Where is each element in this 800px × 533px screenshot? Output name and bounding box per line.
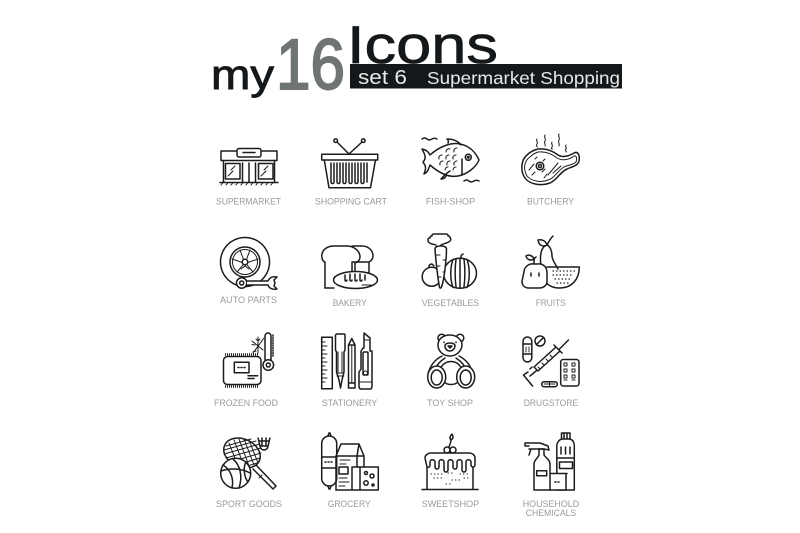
label: fish-shop: FISH-SHOP xyxy=(426,196,475,208)
label: vegetables: VEGETABLES xyxy=(422,298,479,309)
label: sweetshop: SWEETSHOP xyxy=(422,499,479,510)
title number: 16: 16 xyxy=(276,26,345,105)
icon: bread xyxy=(322,246,378,288)
label: supermarket: SUPERMARKET xyxy=(216,196,281,208)
icon: drugstore xyxy=(523,336,579,387)
label: fruits: FRUITS xyxy=(536,298,566,309)
icon: stationery xyxy=(322,333,372,389)
title xyxy=(211,16,622,105)
label: household chemicals xyxy=(523,499,579,519)
icon: frozen food xyxy=(224,333,274,386)
icon: fruits xyxy=(522,236,579,288)
label: drugstore: DRUGSTORE xyxy=(524,398,578,409)
icon: vegetables xyxy=(422,234,476,288)
icon: shopping cart xyxy=(322,139,378,188)
icon: sport goods xyxy=(219,432,276,489)
label: toy shop: TOY SHOP xyxy=(427,398,473,409)
label: bakery: BAKERY xyxy=(333,298,367,309)
label line: household: HOUSEHOLD xyxy=(523,499,579,510)
banner text: set 6: set 6 xyxy=(358,67,407,89)
label: auto parts: AUTO PARTS xyxy=(220,295,277,306)
icon: tire and wrench xyxy=(220,238,277,289)
icon: grocery xyxy=(322,433,378,490)
title word: my: my xyxy=(211,51,274,98)
label: grocery: GROCERY xyxy=(328,499,371,510)
icon: cake xyxy=(422,434,478,490)
title banner xyxy=(350,64,622,88)
label: frozen food: FROZEN FOOD xyxy=(214,398,278,409)
label: butchery: BUTCHERY xyxy=(527,196,575,208)
label: shopping cart: SHOPPING CART xyxy=(315,196,387,208)
label: sport goods: SPORT GOODS xyxy=(216,499,282,510)
title word: Icons: Icons xyxy=(347,16,498,75)
icon: fish xyxy=(422,138,479,182)
icon: supermarket xyxy=(220,148,278,185)
icon: household chemicals xyxy=(525,433,574,490)
icon: steak xyxy=(522,134,579,185)
label: stationery: STATIONERY xyxy=(322,398,378,409)
label line: chemicals: CHEMICALS xyxy=(526,508,576,519)
icon: teddy bear xyxy=(428,334,475,388)
banner text: Supermarket Shopping: Supermarket Shopping xyxy=(427,68,620,88)
